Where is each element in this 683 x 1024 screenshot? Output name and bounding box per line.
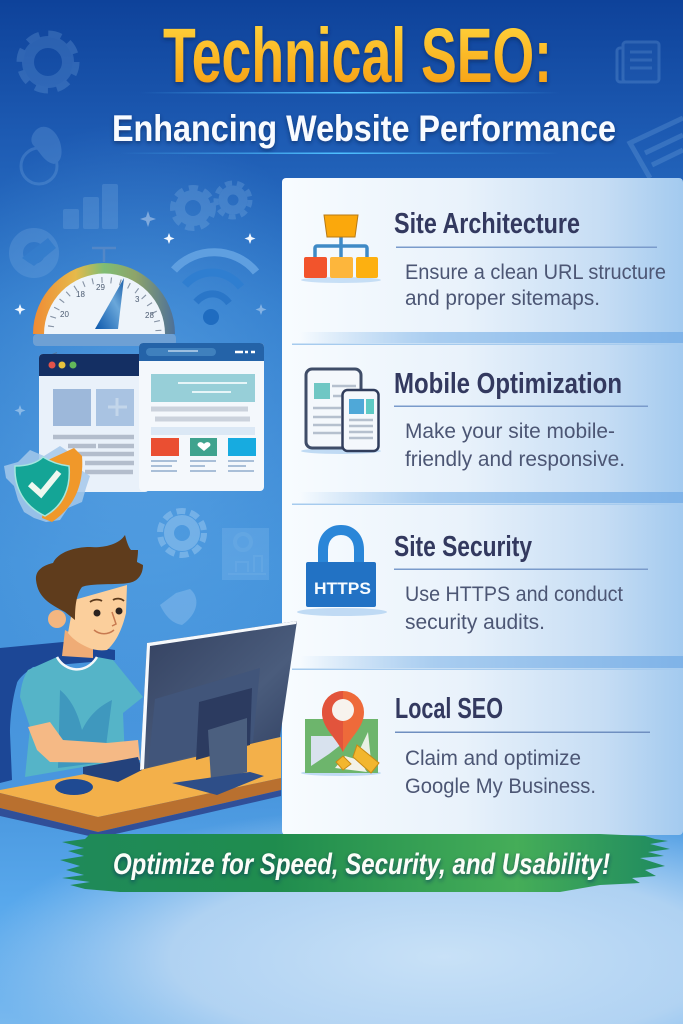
arm <box>28 722 140 763</box>
icon: tablet and phone <box>301 369 381 454</box>
icon: map pin chart <box>222 528 269 580</box>
faint background icons lower <box>160 511 269 625</box>
icon: HTTPS padlock: HTTPS <box>314 579 371 598</box>
sparkles <box>14 211 266 416</box>
heading: Local SEO <box>395 693 503 725</box>
icon: speedometer gauge: 18 <box>76 290 85 299</box>
description: Use HTTPS and conduct <box>405 582 623 606</box>
desk front <box>0 778 281 832</box>
row divider band <box>292 332 683 345</box>
description: and proper sitemaps. <box>405 286 600 310</box>
heading: Mobile Optimization <box>394 368 622 400</box>
description: Google My Business. <box>405 774 596 798</box>
icon: double gears <box>173 183 250 228</box>
icon: refresh circle <box>21 127 62 184</box>
icon: bar chart <box>63 184 118 229</box>
icon: speedometer gauge: 20 <box>60 310 69 319</box>
torso t-shirt <box>20 657 143 777</box>
heading: Site Architecture <box>394 208 580 240</box>
browser window back <box>39 354 149 492</box>
hair <box>36 535 143 620</box>
description: friendly and responsive. <box>405 447 625 471</box>
person at desk <box>0 535 281 838</box>
icon: sitemap hierarchy <box>301 215 381 283</box>
description: security audits. <box>405 610 545 634</box>
icon: wifi signal <box>174 252 256 325</box>
icon: tilted document <box>630 118 683 178</box>
divider top <box>140 92 560 94</box>
row: site architecture <box>301 208 666 310</box>
icon: speedometer gauge: 28 <box>145 311 154 320</box>
icon: speedometer gauge <box>33 248 176 388</box>
computer monitor <box>140 621 297 795</box>
icon: gear lower <box>160 511 204 555</box>
icon: check badge <box>160 589 196 625</box>
keyboard <box>83 757 142 782</box>
panel: content list <box>282 178 683 835</box>
icon: speedometer gauge: 29 <box>96 283 105 292</box>
ear <box>48 610 66 628</box>
row: site security <box>297 530 648 634</box>
icon: speedometer gauge: 3 <box>135 295 140 304</box>
icon: gear top-left <box>20 34 76 90</box>
icon: HTTPS padlock <box>297 530 387 616</box>
description: Claim and optimize <box>405 746 581 770</box>
description: Ensure a clean URL structure <box>405 260 666 284</box>
subtitle: Enhancing Website Performance <box>112 108 616 149</box>
description: Make your site mobile- <box>405 419 615 443</box>
neck <box>62 630 93 658</box>
row: local seo <box>301 691 650 798</box>
desk top <box>0 737 281 817</box>
face <box>68 585 127 650</box>
row: mobile optimization <box>301 368 648 471</box>
icon: map pin on map <box>301 691 381 776</box>
row divider band <box>292 492 683 505</box>
faint background icons <box>16 34 683 271</box>
browser window front <box>139 343 264 491</box>
icon: documents <box>617 42 659 82</box>
chair <box>0 642 115 783</box>
banner <box>60 834 670 892</box>
divider bottom <box>120 152 560 154</box>
shirt collar <box>57 657 97 669</box>
icon: shield with check <box>4 446 90 522</box>
icon: chart dial <box>16 235 56 271</box>
mouse <box>55 779 93 795</box>
row divider band <box>292 656 683 670</box>
heading: Site Security <box>394 531 532 563</box>
